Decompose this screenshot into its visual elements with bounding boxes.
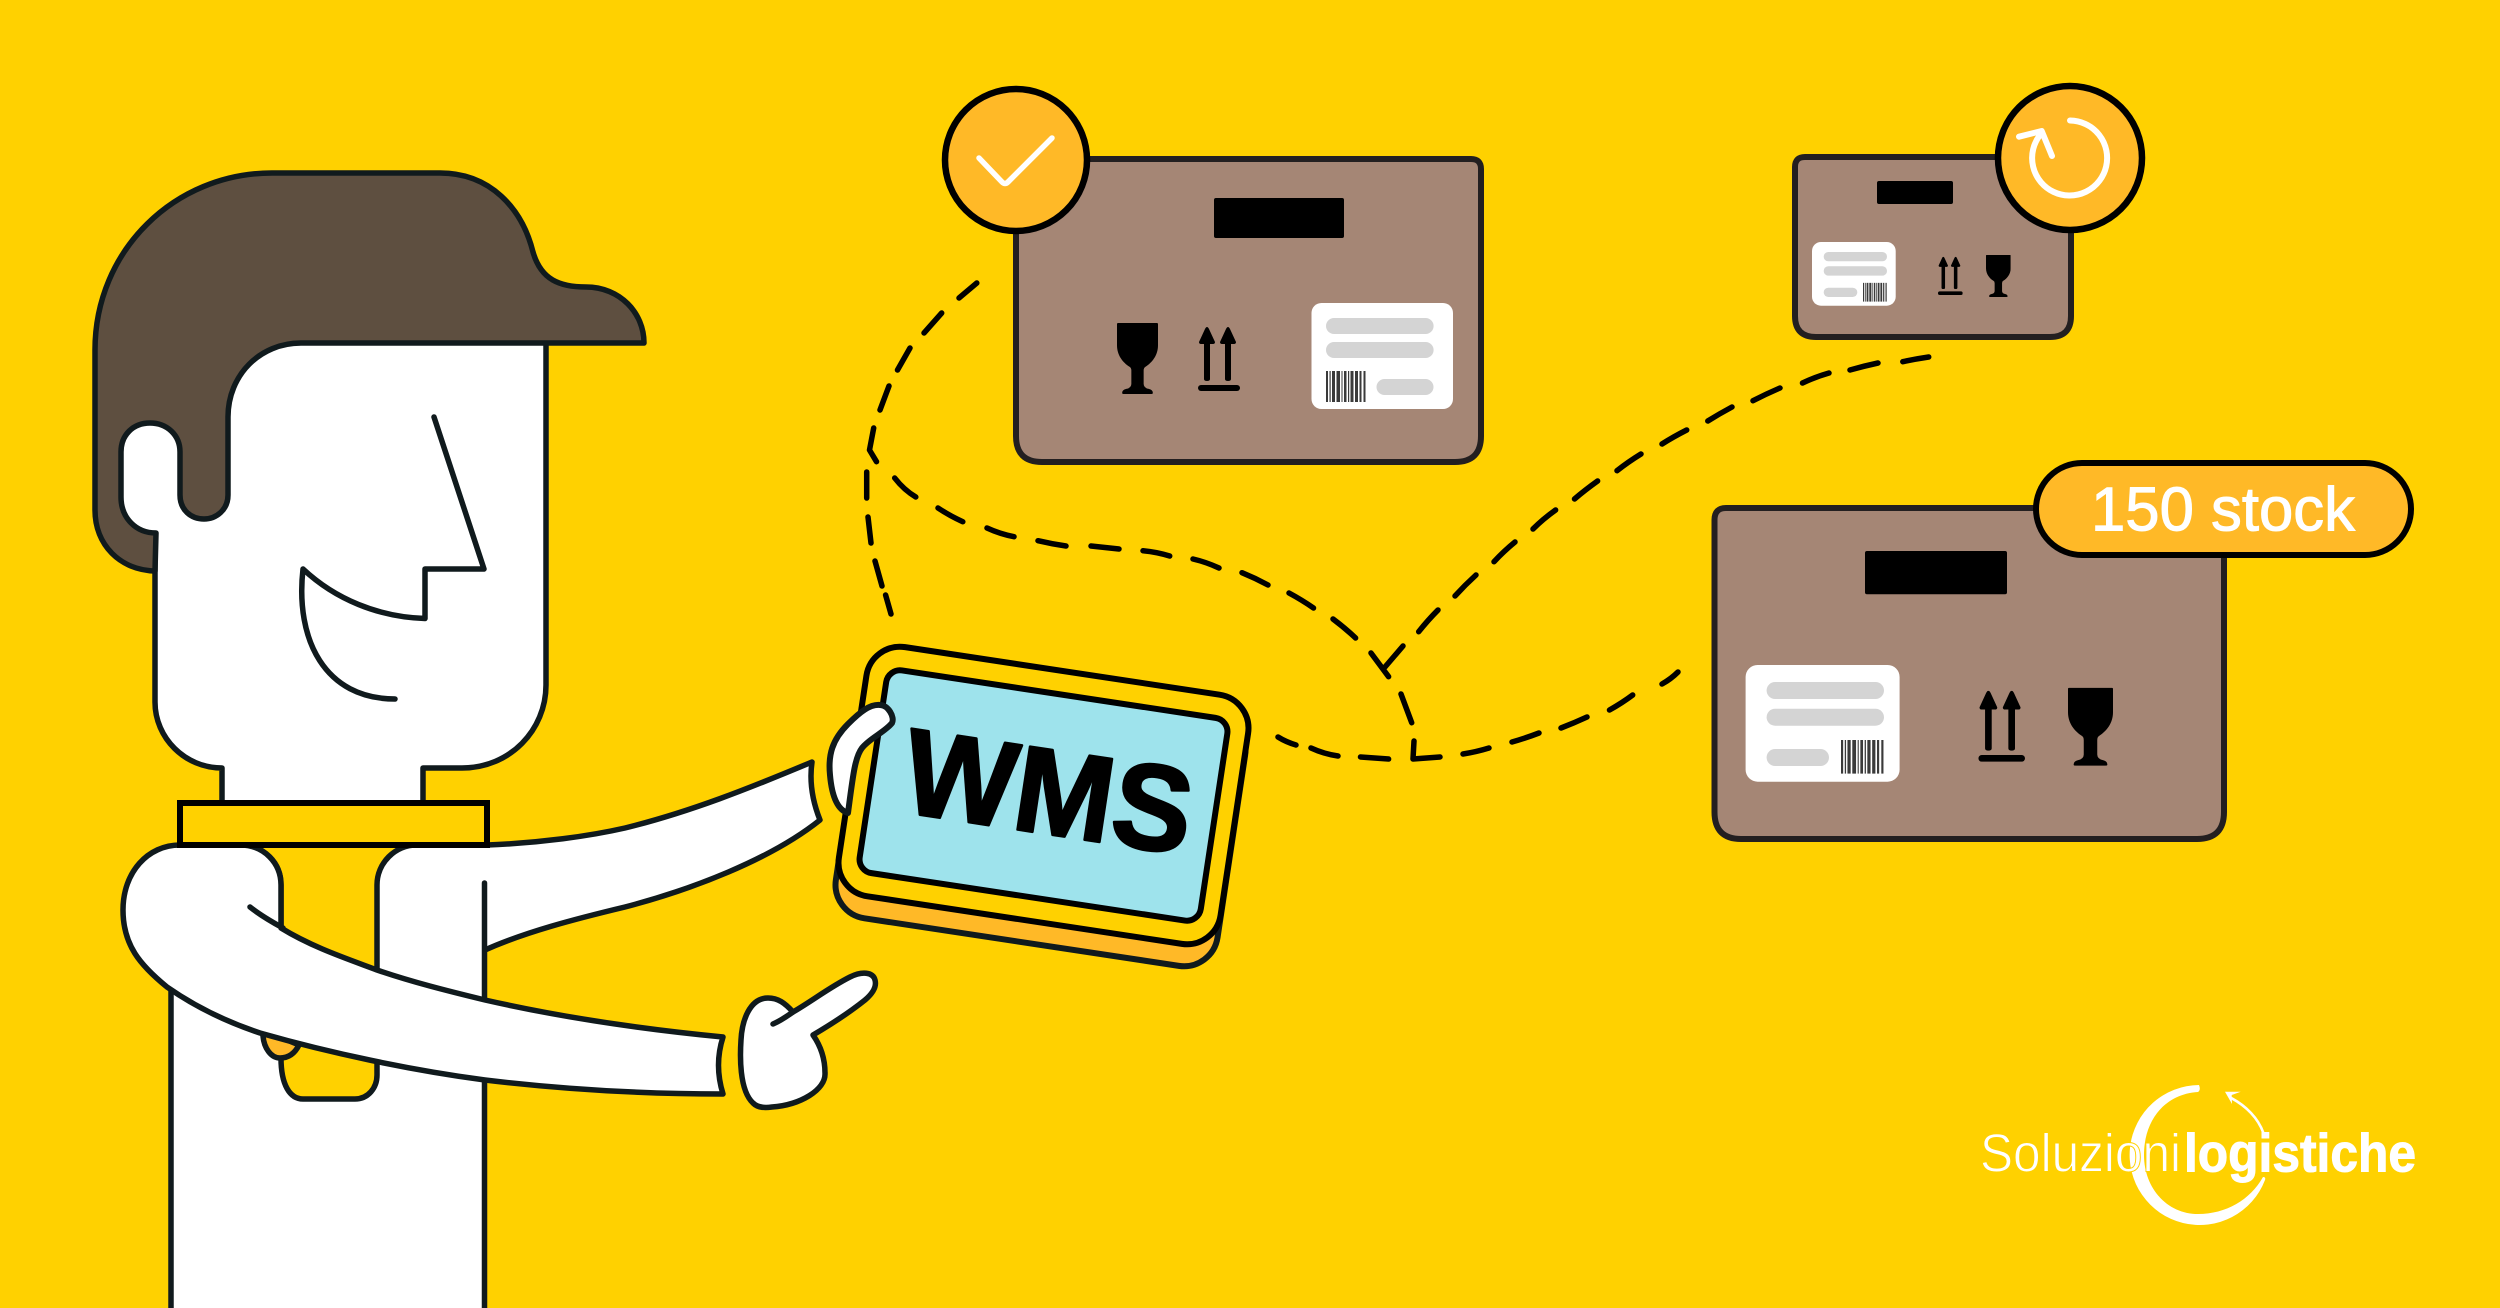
logo word Soluzioni: Soluzioni <box>1980 1124 2181 1184</box>
yellow vest strip and pocket <box>240 845 417 1099</box>
box: reorder package <box>1795 86 2142 337</box>
icon: fragile glass <box>1986 255 2011 297</box>
box: checked package <box>945 89 1481 462</box>
stock badge <box>2036 463 2411 555</box>
check badge <box>945 89 1087 231</box>
tablet front plate <box>834 642 1253 949</box>
route: tablet to checked box <box>867 283 977 614</box>
icon: this way up arrows <box>1198 327 1240 391</box>
neck and face fill <box>110 343 546 810</box>
logo: Soluzioni logistiche <box>1980 1085 2416 1225</box>
WMS label: WMS <box>895 703 1202 881</box>
shipping label <box>1812 242 1896 306</box>
tablet <box>830 642 1253 971</box>
tablet screen <box>858 668 1229 923</box>
route: junction to second box <box>1385 357 1929 667</box>
box body <box>1016 159 1481 462</box>
logo arrow <box>2225 1092 2263 1133</box>
dashed routes connecting tablet and boxes <box>867 283 1929 759</box>
box body <box>1714 508 2224 839</box>
pointing hand <box>740 973 875 1108</box>
box black tag <box>1877 181 1953 204</box>
refresh badge <box>1998 86 2142 230</box>
thumb on tablet <box>830 705 893 813</box>
stock badge: 150 stock <box>2091 476 2356 545</box>
icon: fragile glass <box>1117 323 1158 394</box>
nose and smile <box>302 417 484 699</box>
tablet back plate <box>831 664 1250 971</box>
box body <box>1795 157 2071 337</box>
box black tag <box>1865 551 2007 594</box>
collar <box>180 803 487 845</box>
shipping label <box>1312 303 1453 409</box>
thumb line of pointing hand <box>773 1012 793 1024</box>
hair <box>95 173 644 571</box>
logo word logistiche: logistiche <box>2184 1124 2416 1184</box>
torso side lines <box>171 883 484 1308</box>
logo swoosh <box>2130 1085 2265 1225</box>
shipping label <box>1746 665 1900 782</box>
icon: this way up arrows <box>1938 257 1963 295</box>
box: stock package <box>1714 463 2411 839</box>
box black tag <box>1214 198 1344 238</box>
left arm pointing <box>123 845 723 1094</box>
right arm raised holding tablet <box>417 762 820 950</box>
orange pen in pocket <box>263 1030 299 1058</box>
icon: this way up arrows <box>1978 691 2025 762</box>
torso <box>171 845 485 1308</box>
arm crease line <box>250 907 283 928</box>
route: checked box to junction <box>895 478 1440 759</box>
neck and face outline <box>155 343 546 810</box>
person <box>95 173 875 1308</box>
route: junction to third box <box>1278 672 1678 759</box>
icon: fragile glass <box>2068 688 2113 766</box>
